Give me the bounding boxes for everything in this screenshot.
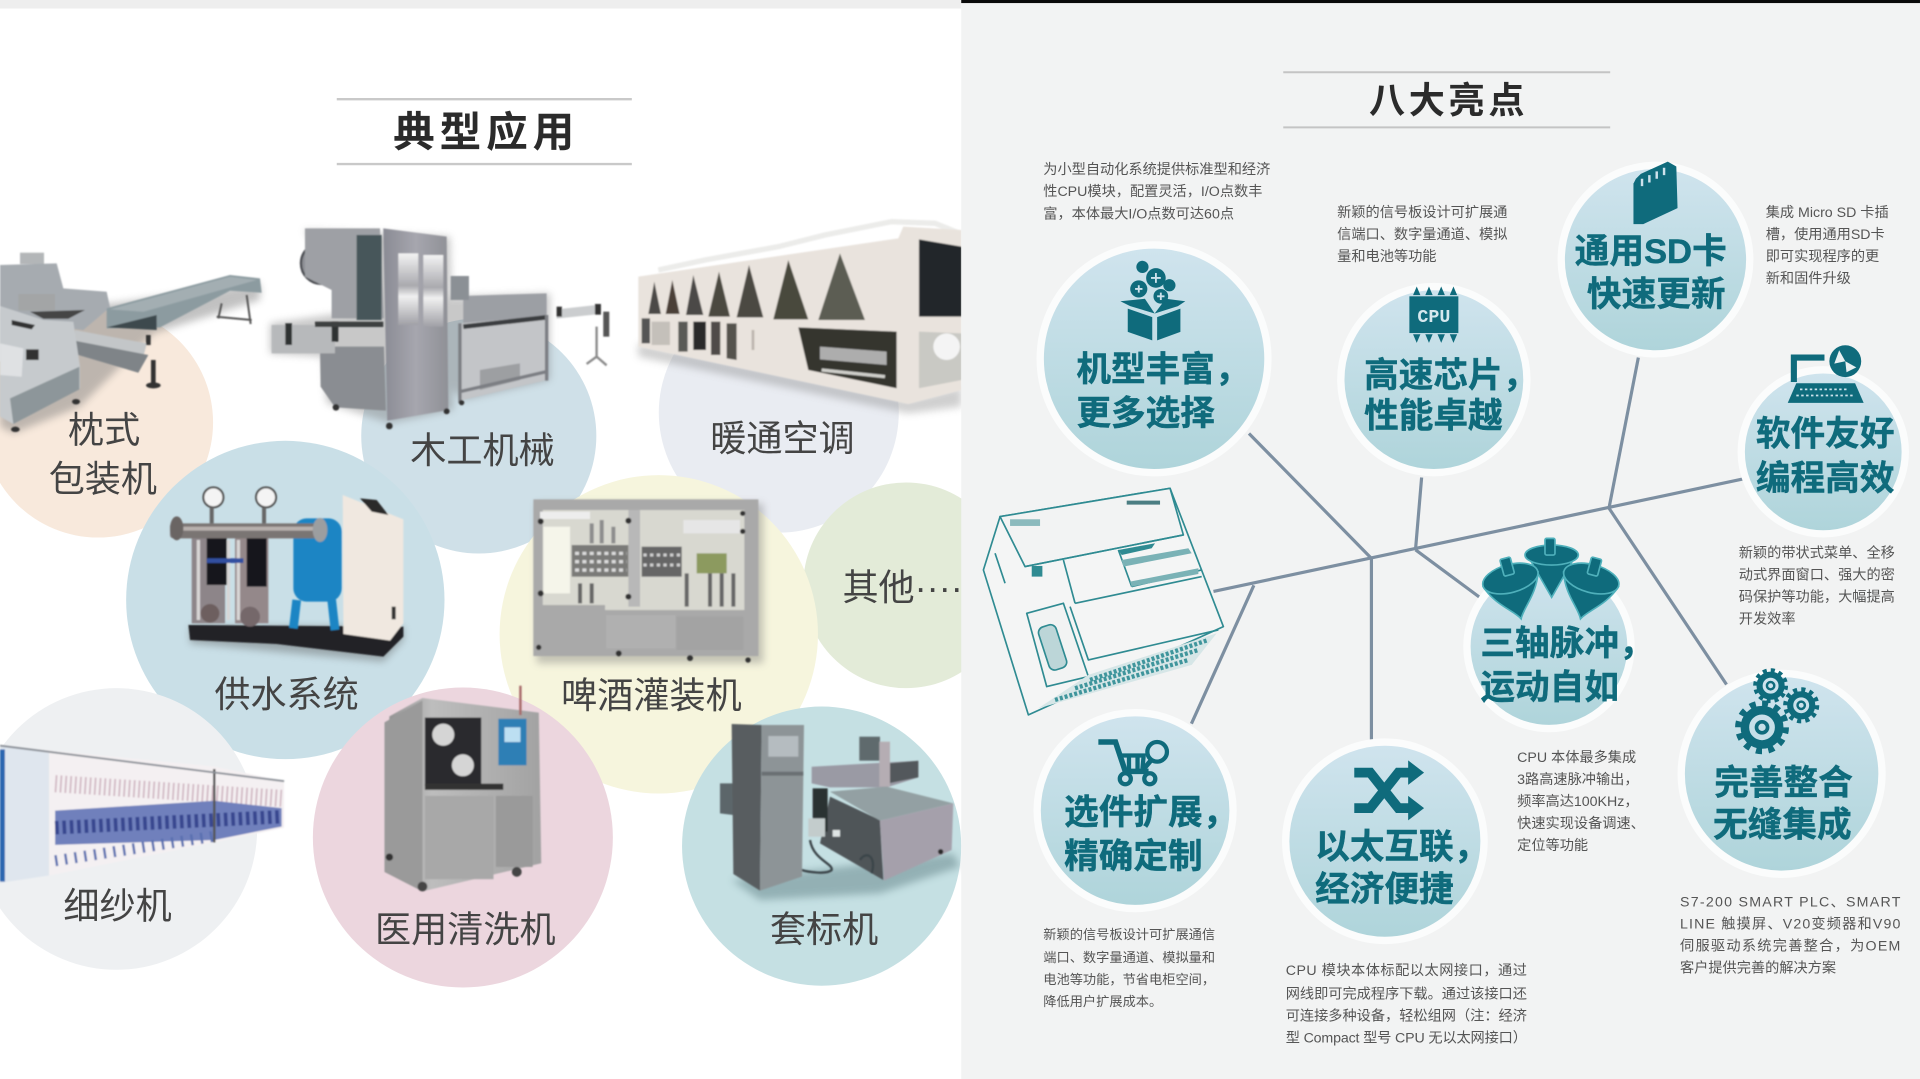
highlight 7: expansion: 选件扩展，: [1064, 794, 1237, 832]
highlight 3: SD card: 通用SD卡: [1575, 233, 1727, 271]
description: fast chip: 量和电池等功能: [1337, 248, 1436, 265]
description: expansion: [1043, 927, 1215, 1009]
highlight 2: fast chip: 高速芯片，: [1364, 357, 1537, 395]
description: expansion: 新颖的信号板设计可扩展通信: [1043, 927, 1215, 942]
description: software: 开发效率: [1739, 611, 1796, 628]
highlight 8: ethernet: 经济便捷: [1315, 871, 1454, 909]
description: ethernet: CPU 模块本体标配以太网接口，通过: [1286, 962, 1527, 979]
description: expansion: 端口、数字量通道、模拟量和: [1043, 950, 1215, 965]
PLC controller illustration: [983, 488, 1223, 715]
label: woodworking: 木工机械: [410, 430, 555, 471]
icon: spinning tops: [1478, 538, 1624, 626]
label: pillow packaging: [49, 409, 157, 499]
label: water supply: 供水系统: [214, 674, 359, 715]
description: software: 新颖的带状式菜单、全移: [1739, 544, 1895, 561]
highlight 1: model variety: 机型丰富，: [1076, 351, 1250, 389]
application background circles: [0, 293, 1009, 988]
panel: typical applications: [0, 0, 1009, 1079]
machine: beer filler: [533, 499, 763, 663]
description: fast chip: 新颖的信号板设计可扩展通: [1337, 205, 1507, 221]
machine: labeling: [720, 724, 960, 900]
highlight 6: integration: 无缝集成: [1713, 806, 1852, 844]
label: spinning frame: 细纱机: [63, 886, 172, 927]
description: ethernet: 网线即可完成程序下载。通过该接口还: [1286, 985, 1527, 1002]
highlight 6: integration: [1681, 670, 1882, 874]
machine: woodworking: [270, 228, 609, 429]
highlight 6: integration: 完善整合: [1714, 765, 1853, 803]
description: three axis pulse: 快速实现设备调速、: [1517, 815, 1645, 832]
label: medical washer: 医用清洗机: [375, 909, 556, 950]
description: integration: LINE 触摸屏、V20变频器和V90: [1680, 916, 1900, 932]
description: fast chip: [1337, 205, 1507, 265]
highlight 3: SD card: [1561, 162, 1750, 354]
label: beer filler: 啤酒灌装机: [561, 675, 742, 716]
description: integration: S7-200 SMART PLC、SMART: [1680, 894, 1901, 910]
highlight 8: ethernet: 以太互联，: [1315, 828, 1488, 866]
description: SD card: [1766, 204, 1889, 287]
description: fast chip: 信端口、数字量通道、模拟: [1337, 227, 1507, 243]
description: ethernet: 型 Compact 型号 CPU 无以太网接口）: [1286, 1029, 1527, 1046]
highlight 5: three axis pulse: 运动自如: [1480, 669, 1619, 707]
highlight 2: fast chip: 性能卓越: [1364, 397, 1503, 435]
icon: gears: [1738, 670, 1817, 751]
icon: laptop and disc: [1788, 345, 1864, 403]
machine: spinning frame: [0, 746, 284, 883]
icon: CPU chip: CPU: [1417, 307, 1450, 328]
highlight 4: software: 编程高效: [1756, 460, 1894, 498]
highlight 4: software: [1741, 345, 1905, 534]
description: SD card: 新和固件升级: [1766, 271, 1851, 287]
label: pillow packaging: 枕式: [68, 409, 140, 450]
label: others: 其他····: [842, 567, 963, 608]
connector lines: [1191, 358, 1744, 740]
description: three axis pulse: 频率高达100KHz，: [1517, 793, 1639, 810]
heading: eight highlights: 八大亮点: [1369, 80, 1528, 121]
icon: SD card: [1633, 162, 1678, 224]
highlight 2: fast chip: [1341, 287, 1537, 473]
highlight 5: three axis pulse: [1467, 538, 1654, 729]
description: model variety: 性CPU模块，配置灵活，I/O点数丰: [1043, 184, 1262, 200]
machine: pillow packaging: [0, 253, 262, 433]
icon: cart with magnifier: [1098, 742, 1167, 784]
description: ethernet: 可连接多种设备，轻松组网（注：经济: [1286, 1007, 1527, 1024]
label: pillow packaging: 包装机: [49, 458, 157, 499]
description: ethernet: [1286, 962, 1527, 1046]
highlight 8: ethernet: [1286, 742, 1488, 940]
description: model variety: [1043, 162, 1270, 222]
description: integration: 伺服驱动系统完善整合，为OEM: [1680, 939, 1900, 955]
description: expansion: 电池等功能，节省电柜空间，: [1043, 971, 1215, 987]
icon: CPU chip: [1409, 287, 1458, 343]
heading: typical applications: 典型应用: [393, 109, 579, 156]
description: integration: 客户提供完善的解决方案: [1680, 960, 1836, 977]
description: three axis pulse: CPU 本体最多集成: [1517, 749, 1636, 766]
machine: water supply system: [170, 487, 403, 662]
description: integration: [1680, 894, 1901, 977]
description: SD card: 集成 Micro SD 卡插: [1766, 204, 1889, 221]
description: software: 码保护等功能，大幅提高: [1739, 589, 1895, 606]
highlight 3: SD card: 快速更新: [1587, 276, 1725, 314]
highlight 1: model variety: [1040, 245, 1268, 473]
label: HVAC: 暖通空调: [710, 418, 855, 459]
panel: eight highlights: [961, 0, 1920, 1079]
description: SD card: 槽，使用通用SD卡: [1766, 226, 1885, 243]
highlight 5: three axis pulse: 三轴脉冲，: [1480, 625, 1654, 663]
description: software: [1739, 544, 1895, 628]
highlight 4: software: 软件友好: [1756, 416, 1894, 454]
description: model variety: 富，本体最大I/O点数可达60点: [1043, 205, 1234, 222]
description: SD card: 即可实现程序的更: [1766, 249, 1879, 265]
machine: HVAC chiller: [638, 222, 962, 413]
highlight 7: expansion: 精确定制: [1064, 838, 1203, 876]
description: expansion: 降低用户扩展成本。: [1043, 993, 1162, 1009]
icon: shuffle arrows: [1354, 760, 1424, 820]
description: software: 动式界面窗口、强大的密: [1739, 566, 1895, 583]
description: three axis pulse: 定位等功能: [1517, 837, 1588, 854]
machine: medical washer: [385, 686, 541, 891]
description: model variety: 为小型自动化系统提供标准型和经济: [1043, 162, 1270, 178]
icon: open box: [1120, 261, 1185, 340]
highlight 7: expansion: [1037, 713, 1237, 909]
highlight 1: model variety: 更多选择: [1076, 395, 1215, 433]
label: labeling machine: 套标机: [770, 909, 878, 950]
description: three axis pulse: 3路高速脉冲输出，: [1517, 771, 1639, 788]
description: three axis pulse: [1517, 749, 1645, 854]
